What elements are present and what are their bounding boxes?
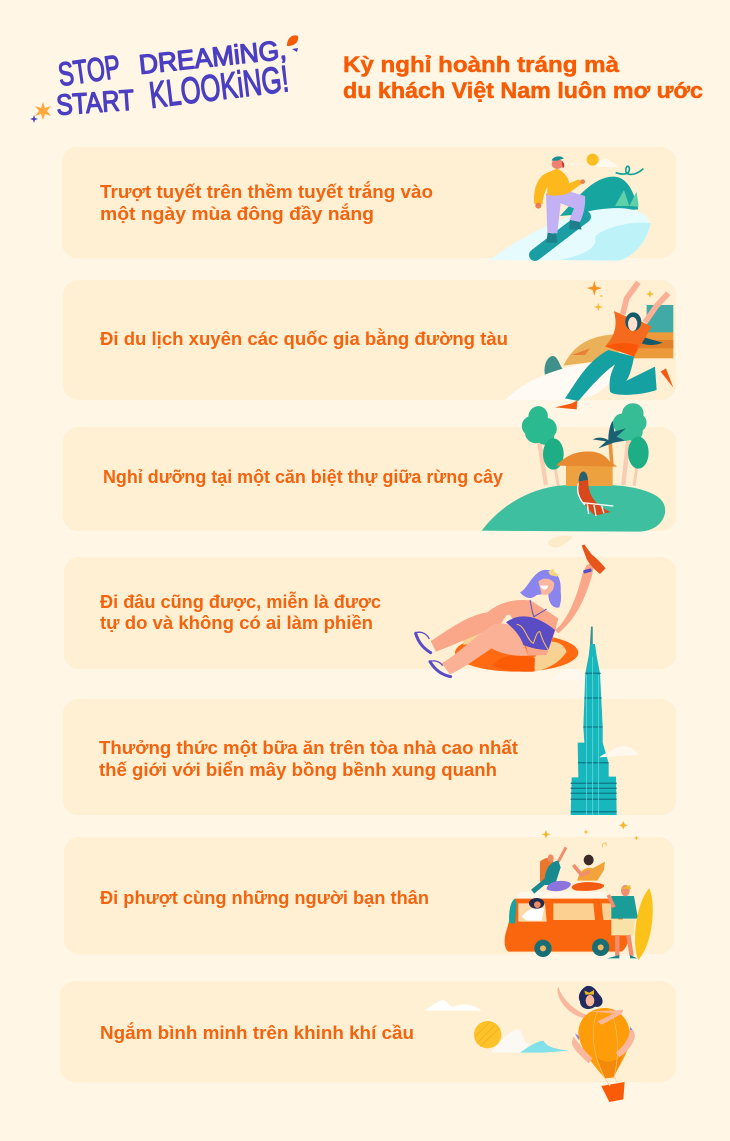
text: freedom: tự do và không có ai làm phiền bbox=[100, 612, 373, 633]
illustration: sun and clouds bbox=[424, 1000, 569, 1053]
text: freedom bbox=[100, 591, 381, 633]
illustration: woman on swim ring bbox=[416, 536, 606, 677]
logo: Stop dreaming, start klooking bbox=[30, 35, 298, 123]
panel: ski card background bbox=[62, 147, 676, 258]
illustration: snowboarder bbox=[490, 154, 651, 261]
panel: freedom card background bbox=[64, 557, 676, 669]
logo: Stop dreaming, start klooking: STOP bbox=[56, 48, 122, 93]
text: skyscraper dining: thế giới với biển mây bồng bềnh xung quanh bbox=[99, 759, 497, 780]
panel: balloon card background bbox=[60, 981, 676, 1082]
title: Kỳ nghỉ hoành tráng mà bbox=[343, 52, 620, 77]
panel: skyscraper card background bbox=[63, 699, 676, 815]
text: skiing: Trượt tuyết trên thềm tuyết trắng vào bbox=[100, 181, 433, 202]
panel: road trip card background bbox=[64, 837, 674, 954]
illustration: villa island bbox=[482, 403, 665, 532]
text: villa: Nghỉ dưỡng tại một căn biệt thự giữa rừng cây bbox=[103, 466, 504, 487]
logo: Stop dreaming, start klooking: DREAMiNG, bbox=[137, 35, 288, 80]
text: skiing bbox=[100, 181, 433, 224]
logo: Stop dreaming, start klooking: KLOOKiNG! bbox=[147, 58, 291, 116]
title bbox=[343, 52, 703, 103]
logo: Stop dreaming, start klooking: START bbox=[55, 85, 136, 122]
illustration: Burj Khalifa tower bbox=[553, 627, 639, 815]
illustration: friends on camper van bbox=[505, 821, 653, 960]
title: du khách Việt Nam luôn mơ ước bbox=[343, 78, 703, 103]
text: train: Đi du lịch xuyên các quốc gia bằng đường tàu bbox=[100, 328, 508, 349]
text: freedom: Đi đâu cũng được, miễn là được bbox=[100, 591, 381, 612]
illustration: train traveller bbox=[505, 281, 673, 409]
panel: villa card background bbox=[63, 427, 676, 531]
text: skyscraper dining: Thưởng thức một bữa ăn trên tòa nhà cao nhất bbox=[99, 737, 518, 758]
text: skyscraper dining bbox=[99, 737, 518, 780]
text: skiing: một ngày mùa đông đầy nắng bbox=[100, 203, 374, 224]
text: balloon: Ngắm bình minh trên khinh khí cầu bbox=[100, 1022, 414, 1043]
panel: train card background bbox=[63, 280, 676, 400]
text: road trip: Đi phượt cùng những người bạn thân bbox=[100, 887, 429, 908]
illustration: woman on hot air balloon bbox=[557, 986, 635, 1102]
